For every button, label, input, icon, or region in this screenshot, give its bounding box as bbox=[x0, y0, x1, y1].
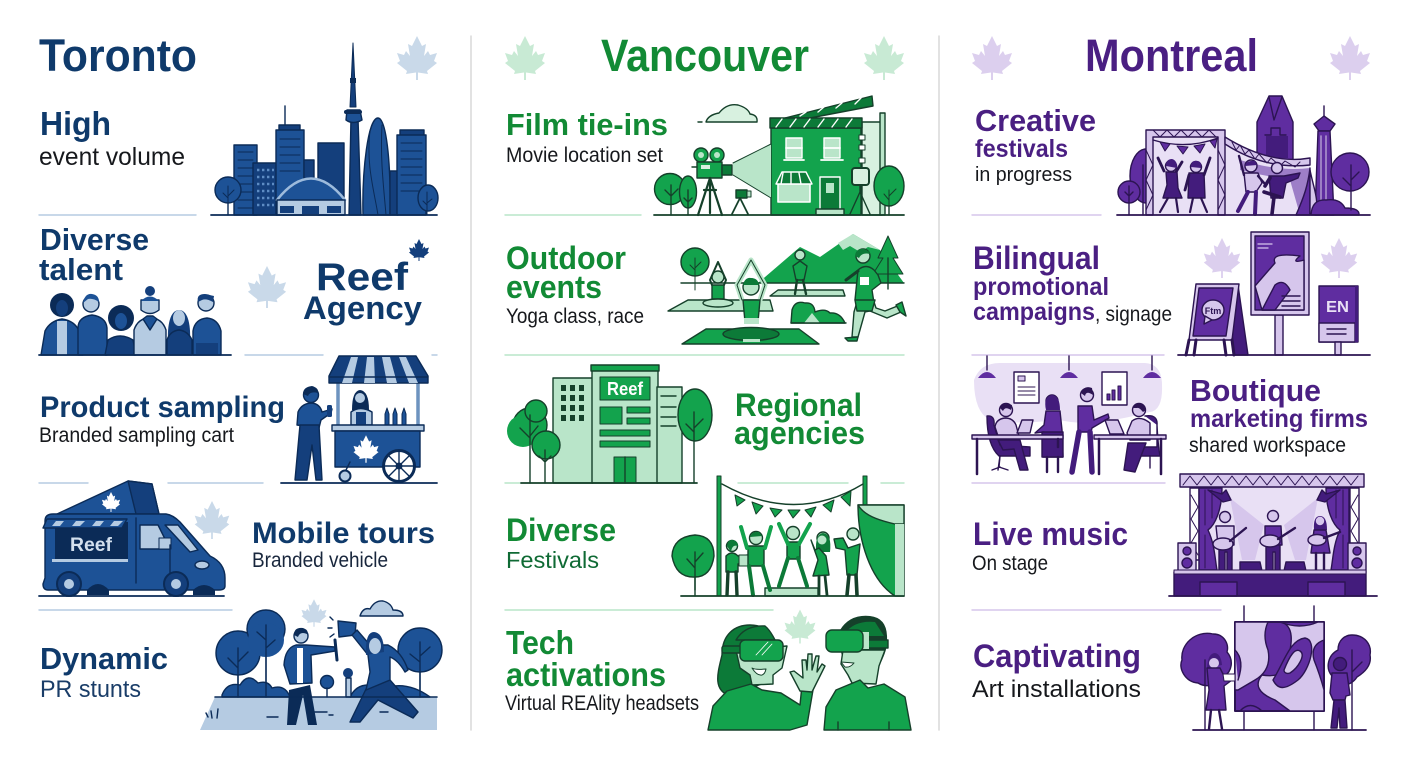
illustration: bilingual signage bbox=[1178, 232, 1370, 355]
text: Bilingual promotional campaigns, signage: , signage bbox=[1095, 303, 1172, 326]
illustration: group of diverse people bbox=[39, 286, 231, 355]
heading: Vancouver: Vancouver bbox=[601, 30, 809, 81]
text: Diverse Festivals: Diverse bbox=[506, 512, 616, 548]
text: Diverse talent bbox=[39, 222, 149, 287]
text: Live music On stage: Live music bbox=[973, 516, 1128, 552]
illustration: live music stage bbox=[1169, 474, 1377, 596]
text: Regional agencies: Regional bbox=[735, 387, 862, 423]
text: Boutique marketing firms shared workspace: shared workspace bbox=[1189, 434, 1346, 457]
text: Tech activations: activations bbox=[506, 656, 666, 693]
illustration: branded truck: Reef bbox=[70, 535, 113, 556]
text: Outdoor events: Outdoor bbox=[506, 240, 626, 276]
text: Outdoor events: events bbox=[506, 269, 602, 305]
text: High event volume: High bbox=[40, 105, 111, 142]
text: Mobile tours: Mobile tours bbox=[252, 517, 435, 550]
text: Live music On stage bbox=[972, 516, 1128, 575]
text: Outdoor events bbox=[506, 240, 644, 328]
text: High event volume: event volume bbox=[39, 143, 185, 171]
text: Film tie-ins bbox=[506, 107, 668, 167]
icon: maple leaf right bbox=[864, 36, 904, 80]
text: Captivating Art installations: Art installations bbox=[972, 676, 1141, 703]
illustration: Reef regional agency building bbox=[507, 365, 712, 483]
logo: Reef Agency: Reef bbox=[316, 256, 409, 299]
illustration: branded sampling cart bbox=[281, 356, 437, 483]
text: Film tie-ins: Movie location set bbox=[506, 144, 663, 167]
icon: faint maple leaf bbox=[248, 266, 286, 308]
illustration: Toronto skyline bbox=[211, 43, 438, 215]
heading: Montreal: Montreal bbox=[1085, 30, 1258, 81]
text: Tech activations bbox=[505, 624, 699, 715]
text: Creative festivals in progress: Creative bbox=[975, 103, 1096, 138]
text: Bilingual promotional campaigns, signage bbox=[973, 240, 1172, 326]
illustration: bilingual signage: EN bbox=[1326, 299, 1349, 316]
illustration: movie location set bbox=[654, 96, 904, 215]
text: Captivating Art installations: Captivating bbox=[973, 638, 1141, 674]
text: Dynamic PR stunts: Dynamic bbox=[40, 641, 168, 676]
text: Mobile tours bbox=[252, 517, 435, 572]
text: Diverse talent: Diverse bbox=[40, 222, 149, 257]
text: Diverse Festivals: Festivals bbox=[506, 547, 599, 573]
icon: maple leaf right bbox=[1330, 36, 1370, 80]
text: Boutique marketing firms shared workspace bbox=[1189, 373, 1368, 457]
text: Diverse talent: talent bbox=[39, 252, 123, 287]
text: Dynamic PR stunts bbox=[40, 641, 168, 703]
illustration: PR stunt in a park bbox=[200, 599, 442, 730]
illustration: shared workspace bbox=[972, 356, 1166, 474]
text: Boutique marketing firms shared workspace: Boutique bbox=[1190, 373, 1321, 408]
text: Diverse Festivals bbox=[506, 512, 616, 573]
illustration: people in VR headsets bbox=[708, 610, 911, 730]
text: Regional agencies bbox=[734, 387, 865, 451]
text: Bilingual promotional campaigns, signage: Bilingual bbox=[973, 240, 1100, 276]
icon: maple leaf left bbox=[972, 36, 1012, 80]
text: Creative festivals in progress bbox=[975, 103, 1096, 186]
illustration: bilingual signage: Ftm bbox=[1205, 306, 1221, 316]
text: Dynamic PR stunts: PR stunts bbox=[40, 676, 141, 703]
text: Boutique marketing firms shared workspace: marketing firms bbox=[1190, 405, 1368, 433]
text: Outdoor events: Yoga class, race bbox=[506, 305, 644, 328]
text: Live music On stage: On stage bbox=[972, 552, 1048, 575]
text: High event volume bbox=[39, 105, 185, 171]
icon: maple leaf bbox=[397, 36, 437, 80]
icon: maple leaf left bbox=[505, 36, 545, 80]
illustration: creative festival stage bbox=[1117, 96, 1370, 215]
logo: Reef Agency bbox=[303, 239, 429, 326]
text: Product sampling: Branded sampling cart bbox=[39, 424, 234, 447]
text: Product sampling bbox=[39, 391, 285, 447]
illustration: branded truck bbox=[39, 481, 225, 596]
text: Creative festivals in progress: festivals bbox=[975, 135, 1068, 163]
text: Mobile tours: Branded vehicle bbox=[252, 549, 388, 572]
icon: faint maple leaf bbox=[195, 501, 229, 539]
text: Film tie-ins: Film tie-ins bbox=[506, 107, 668, 142]
text: Regional agencies: agencies bbox=[734, 415, 865, 451]
text: Creative festivals in progress: in progress bbox=[975, 164, 1072, 186]
text: Product sampling: Product sampling bbox=[40, 391, 285, 424]
heading: Toronto: Toronto bbox=[39, 30, 197, 81]
illustration: yoga class and race bbox=[668, 234, 906, 344]
text: Captivating Art installations bbox=[972, 638, 1141, 703]
illustration: art installation bbox=[1181, 606, 1370, 730]
panel: Vancouver bbox=[505, 30, 911, 730]
text: Bilingual promotional campaigns, signage: campaigns bbox=[973, 298, 1095, 326]
panel: Toronto bbox=[39, 30, 442, 730]
text: Bilingual promotional campaigns, signage: promotional bbox=[973, 273, 1109, 301]
panel: Montreal bbox=[972, 30, 1377, 730]
text: Tech activations: Tech bbox=[506, 624, 574, 661]
logo: Reef Agency: Agency bbox=[303, 290, 422, 326]
text: Tech activations: Virtual REAlity headsets bbox=[505, 692, 699, 715]
illustration: Reef regional agency building: Reef bbox=[607, 379, 644, 399]
illustration: festival crowd bbox=[672, 476, 904, 596]
